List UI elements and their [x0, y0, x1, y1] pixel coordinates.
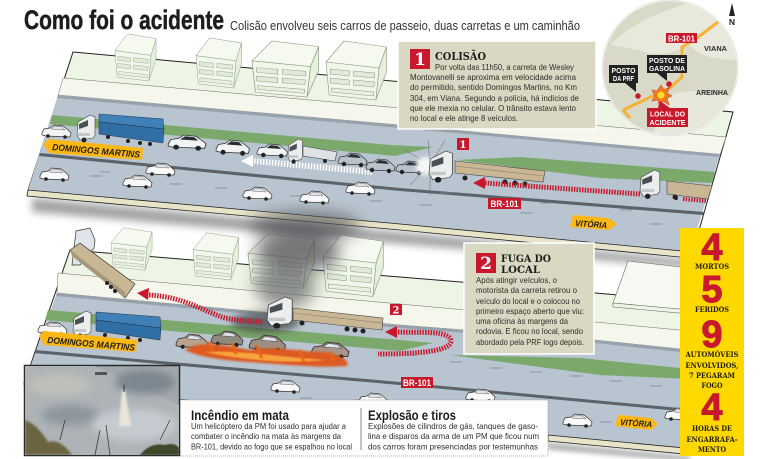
- subtitle: Colisão envolveu seis carros de passeio, duas carretas e um caminhão: [230, 18, 580, 33]
- north arrow: [729, 3, 735, 27]
- buildings scene 1: [115, 34, 386, 100]
- text: collision: 304, em Viana. Segundo a polícia, há indícios de: [410, 93, 579, 103]
- article: forest fire: BR-101, devido ao fogo que se espalhou no local: [191, 442, 352, 452]
- map pin: Posto de gasolina: GASOLINA: [649, 64, 686, 73]
- stat: injured: 5: [701, 269, 723, 311]
- stat: vehicles: ENVOLVIDOS,: [686, 361, 738, 370]
- burning cars: [176, 331, 349, 367]
- text: collision: Montovanelli se aproxima em velocidade acima: [410, 72, 576, 82]
- text: escape: rodovia. E ficou no local, sendo: [476, 326, 583, 336]
- text: escape: motorista da carreta retirou o: [476, 285, 577, 295]
- map pin: Posto da PRF: [609, 65, 641, 99]
- text: escape: [476, 275, 584, 347]
- title: Como foi o acidente: [24, 5, 224, 35]
- crash impact: [398, 140, 445, 195]
- stat: vehicles: FOGO: [702, 381, 723, 390]
- article: forest fire: combater o incêndio na mata às margens da: [191, 431, 341, 441]
- number 1: 1: [414, 50, 426, 70]
- stat: vehicles: AUTOMÓVEIS: [685, 350, 738, 359]
- number 1: [410, 49, 430, 70]
- panel: collision: [398, 41, 596, 129]
- article: explosions and shots: Explosão e tiros: [368, 407, 456, 423]
- cars on opposite lane scene 2: [271, 380, 694, 428]
- label: Domingos Martins scene 2: DOMINGOS MARTINS: [47, 335, 135, 353]
- text: collision: do permitido, sentido Domingos Martins, no Km: [410, 82, 577, 92]
- text: collision: Por volta das 11h50, a carreta de Wesley: [435, 62, 575, 72]
- text: escape: Após atingir veículos, o: [476, 275, 557, 285]
- text: escape: abordado pela PRF logo depois.: [476, 337, 584, 347]
- label: Vitoria scene 1: VITÓRIA: [575, 217, 608, 230]
- second truck scene 1: [640, 170, 712, 200]
- stat: hours: HORAS DE: [692, 424, 732, 433]
- label: Vitoria scene 2: [615, 415, 658, 430]
- stat: hours: ENGARRAFA-: [686, 435, 738, 444]
- truck with tan trailer, scene 2: [267, 297, 383, 334]
- stat: injured: FERIDOS: [695, 305, 729, 314]
- heading: escape: LOCAL: [501, 264, 541, 276]
- blue truck scene 1: [77, 114, 164, 146]
- smoke column: [231, 212, 360, 332]
- flatbed truck: [288, 139, 337, 164]
- truck with tan trailer, collision: [429, 151, 545, 186]
- article: explosions and shots: Explosões de cilindros de gás, tanques de gaso-: [368, 421, 538, 431]
- stat: vehicles: 7 PEGARAM: [689, 371, 735, 380]
- stat: dead: MORTOS: [695, 262, 729, 271]
- map pin: Posto de gasolina: [647, 55, 687, 87]
- photo: helicopter over forest fire: [24, 366, 180, 456]
- stat: hours: MENTO: [698, 445, 726, 454]
- tag BR-101 scene 1: BR-101: [490, 199, 518, 209]
- map label: Local do acidente: ACIDENTE: [650, 118, 686, 127]
- heading: escape: FUGA DO: [501, 253, 551, 265]
- text: escape: primeiro espaço aberto que viu:: [476, 306, 584, 316]
- map pin: Posto da PRF: DA PRF: [613, 74, 634, 83]
- label: Domingos Martins scene 1: DOMINGOS MARTINS: [52, 142, 140, 160]
- text: collision: no local e ele atinge 8 veículos.: [410, 113, 518, 123]
- map icon: crash star: [652, 85, 672, 105]
- article: explosions and shots: dos carros foram presenciadas por testemunhas: [368, 442, 538, 452]
- U-turn red arrow: [378, 326, 451, 354]
- buildings scene 2: [111, 228, 383, 296]
- text panel: fire and explosion: [180, 400, 548, 456]
- article: forest fire: Um helicóptero da PM foi usado para ajudar a: [191, 421, 346, 431]
- road scene 1: collision: [27, 52, 733, 268]
- north arrow: N: [729, 17, 735, 27]
- article: explosions and shots: [368, 407, 539, 452]
- article: forest fire: Incêndio em mata: [191, 407, 289, 423]
- stat: vehicles: [685, 314, 738, 390]
- stat: hours: 4: [701, 387, 723, 429]
- blue truck scene 2: [38, 311, 161, 342]
- stat: injured: [695, 269, 729, 314]
- stat: hours: [686, 387, 738, 454]
- map label: Viana: VIANA: [704, 44, 728, 53]
- tag 2: [390, 304, 402, 316]
- article: explosions and shots: lina e disparos da arma de um PM que ficou num: [368, 431, 539, 441]
- text: escape: veículo do local e o colocou no: [476, 296, 580, 306]
- map label: Local do acidente: LOCAL DO: [650, 110, 685, 118]
- map pin: Posto da PRF: POSTO: [612, 66, 636, 75]
- map label: Local do acidente: [647, 101, 688, 127]
- large flat building: [613, 261, 690, 314]
- stat: vehicles: 9: [701, 314, 723, 356]
- heading: escape: [501, 253, 551, 276]
- flipped truck: [70, 228, 135, 298]
- white arrow: [241, 155, 372, 172]
- cars on opposite lane scene 1: [40, 163, 375, 205]
- panel: escape: [464, 243, 594, 354]
- map label: BR-101: BR-101: [668, 34, 695, 44]
- heading: collision: COLISÃO: [435, 49, 486, 63]
- tag 1: [457, 138, 469, 151]
- red arrow to workshop: [137, 288, 263, 322]
- label: Vitoria scene 2: VITÓRIA: [620, 416, 653, 429]
- locator map: [600, 0, 740, 140]
- text: collision: que ele mexia no celular. O trânsito estava lento: [410, 103, 576, 113]
- road scene 2: escape: [24, 250, 695, 459]
- panel: totals: [680, 227, 744, 456]
- red arrow scene 1: [473, 177, 706, 201]
- tag BR-101 scene 2: BR-101: [403, 378, 431, 388]
- text: collision: [410, 62, 579, 123]
- stat: dead: 4: [701, 227, 723, 269]
- queued cars scene 1: [42, 125, 425, 175]
- tag 1: 1: [460, 140, 466, 151]
- number 2: 2: [480, 254, 492, 274]
- tag 2: 2: [393, 306, 400, 316]
- map pin: Posto de gasolina: POSTO DE: [649, 56, 685, 65]
- article: forest fire: [191, 407, 352, 452]
- label: Vitoria scene 1: [570, 215, 617, 230]
- map label: Areinha: AREINHA: [696, 88, 729, 97]
- text: escape: uma oficina às margens da: [476, 316, 568, 326]
- stat: dead: [695, 227, 729, 271]
